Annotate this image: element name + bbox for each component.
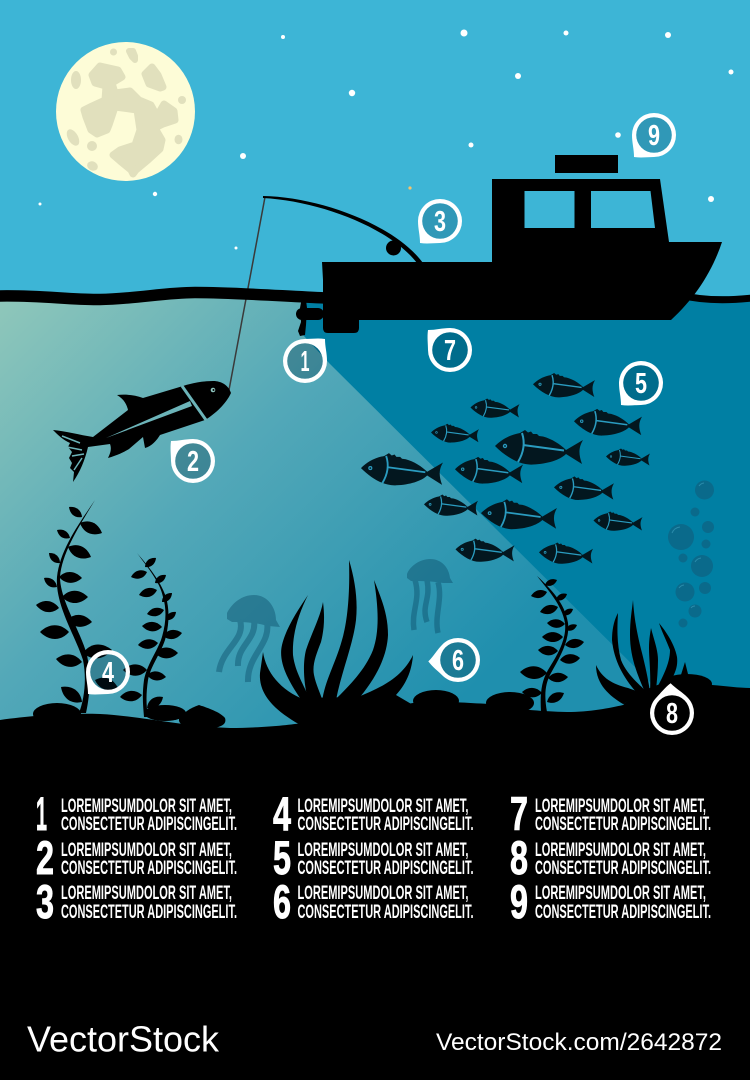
legend column 1: CONSECTETUR ADIPISCINGELIT. [61,857,237,879]
legend column 3: 7 [510,787,528,840]
marker 9: 9 [648,120,660,152]
legend column 1: LOREMIPSUMDOLOR SIT AMET, [61,795,232,817]
legend column 2: CONSECTETUR ADIPISCINGELIT. [298,901,474,923]
legend column 1: 1 [36,787,47,840]
kelp left [35,500,120,713]
fishing rod and line [229,196,423,390]
marker 6 [427,629,489,691]
legend column 1 [36,787,237,928]
legend column 2: LOREMIPSUMDOLOR SIT AMET, [298,795,468,817]
legend column 3: 8 [510,831,528,884]
marker 4: 4 [102,657,114,689]
legend column 1: 3 [36,875,54,928]
legend column 1: CONSECTETUR ADIPISCINGELIT. [61,901,237,923]
kelp right [520,576,585,712]
hooked fish [53,381,231,482]
marker 2 [171,439,215,483]
legend column 2: 5 [273,831,291,884]
jellyfish right [407,559,453,633]
legend column 2: CONSECTETUR ADIPISCINGELIT. [298,857,474,879]
legend column 1: LOREMIPSUMDOLOR SIT AMET, [61,839,232,861]
legend column 1: 2 [36,831,54,884]
legend column 1: LOREMIPSUMDOLOR SIT AMET, [61,882,232,904]
marker 2: 2 [187,446,199,478]
legend column 1: CONSECTETUR ADIPISCINGELIT. [61,813,237,835]
legend column 2: CONSECTETUR ADIPISCINGELIT. [298,813,474,835]
legend column 2: 4 [273,787,291,840]
kelp middle [120,553,183,717]
marker 5 [619,361,663,405]
marker 7 [428,328,472,372]
marker 8: 8 [666,698,678,730]
legend column 2: LOREMIPSUMDOLOR SIT AMET, [298,839,468,861]
VectorStock logo: VectorStock [27,1018,220,1060]
moon [56,42,195,181]
marker 5: 5 [635,368,647,400]
big anemone [260,560,413,730]
marker 1: 1 [300,346,310,378]
rocks [33,674,712,729]
legend column 2: 6 [273,875,291,928]
seabed [0,685,750,1080]
marker 3 [418,199,462,243]
marker 6: 6 [452,645,464,677]
school of fish [361,373,650,564]
marker 4 [86,650,130,694]
marker 8 [641,682,703,744]
light beam [0,296,660,745]
bubbles [668,480,714,628]
waterline [0,292,750,300]
stars [38,30,734,250]
jellyfish left [219,595,280,682]
marker 1 [283,339,327,383]
legend column 2 [273,787,474,928]
boat [296,155,722,336]
marker 7: 7 [444,335,456,367]
legend column 3: 9 [510,875,528,928]
legend column 3 [510,787,711,928]
marker 9 [632,113,676,157]
marker 3: 3 [434,206,446,238]
deep water [0,296,750,746]
sky [0,0,750,300]
VectorStock image URL: VectorStock.com/2642872 [436,1029,722,1056]
legend column 2: LOREMIPSUMDOLOR SIT AMET, [298,882,468,904]
small anemone [596,600,712,712]
